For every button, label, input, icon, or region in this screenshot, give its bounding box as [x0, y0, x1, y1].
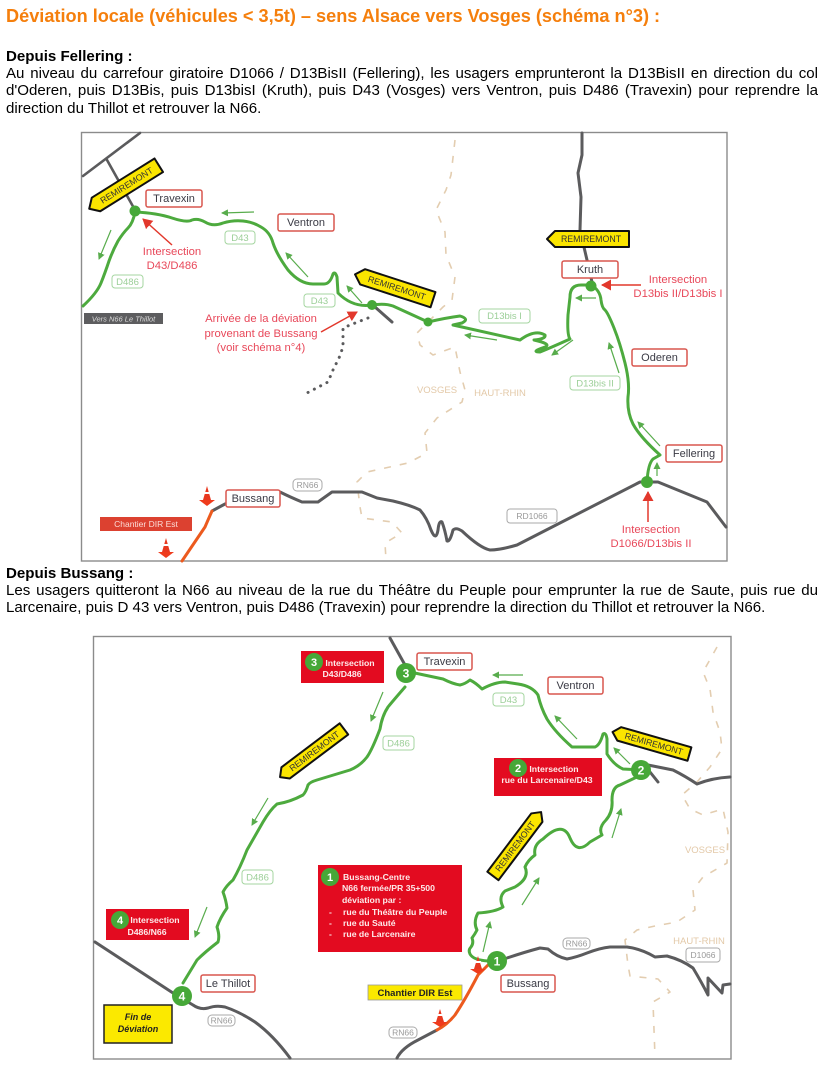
tag: Chantier DIR Est [368, 985, 462, 1000]
place: Bussang: Bussang [507, 978, 549, 990]
road: N66 Le Thillot [95, 942, 290, 1058]
road: east N66 [507, 947, 730, 995]
callout: arrivée de la déviation: provenant de Bussang [204, 328, 318, 340]
road label: D43 second: D43 [311, 296, 328, 307]
callout 1: rue de Larcenaire [343, 929, 416, 939]
sign: Remiremont NW: REMIREMONT [98, 165, 155, 206]
callout: arrivée de la déviation: (voir schéma n°4) [217, 342, 306, 354]
sign: Remiremont Bussang: REMIREMONT [493, 819, 538, 873]
place: Kruth: Kruth [577, 264, 603, 276]
text block: depuis Bussang: Les usagers quitteront la N66 au niveau de la rue du Théâtre du Peuple pour emprunter la rue de Saute, puis rue du [6, 582, 818, 599]
sign: Remiremont centre: REMIREMONT [367, 274, 428, 302]
callout: intersection D1066 [610, 492, 692, 550]
cone [158, 538, 174, 558]
place: Le Thillot: Le Thillot [206, 978, 250, 990]
callout 2 [494, 758, 602, 796]
direction arrows [195, 675, 630, 952]
sign: Remiremont centre [353, 267, 435, 307]
numbered point 1: 1 [494, 954, 501, 968]
road label: D486 upper: D486 [387, 738, 410, 750]
callout 1: - [329, 918, 332, 928]
label: Haut-Rhin: HAUT-RHIN [673, 936, 725, 947]
callout 4 [106, 909, 189, 940]
road: north of Travexin [390, 638, 405, 665]
road: stub [650, 772, 658, 782]
road label: D13bis II: D13bis II [576, 378, 614, 390]
callout 3: D43/D486 [322, 669, 362, 679]
text block: depuis Fellering: Au niveau du carrefour giratoire D1066 / D13BisII (Fellering), les usagers emprunteront la D13BisII en direction du col [6, 65, 818, 82]
road: N66 Bussang [212, 482, 726, 550]
callout 1: N66 fermée/PR 35+500 [342, 883, 435, 893]
place: Ventron [278, 214, 334, 231]
place: Bussang [226, 490, 280, 507]
sign: Remiremont east: REMIREMONT [624, 731, 685, 757]
road label: RN66 east: RN66 [566, 938, 588, 948]
road label: RN66 [293, 479, 322, 491]
place: Ventron: Ventron [557, 680, 594, 692]
road label: RD1066 [507, 509, 557, 523]
road label: D43 [225, 231, 255, 244]
callout 1: rue du Théâtre du Peuple [343, 907, 447, 917]
place: Bussang: Bussang [232, 493, 274, 505]
roadworks section [437, 965, 488, 1030]
callout: intersection D43/D486: Intersection [143, 246, 201, 258]
label: Vosges: VOSGES [685, 845, 725, 856]
callout: intersection D13bis [602, 274, 723, 300]
place: Oderen: Oderen [641, 352, 678, 364]
sign: Remiremont Bussang [487, 808, 547, 880]
callout 4: D486/N66 [127, 927, 167, 937]
road: N66 south [397, 1030, 437, 1058]
detour route D43 [410, 672, 641, 770]
cone [470, 956, 486, 974]
callout 2: rue du Larcenaire/D43 [501, 775, 593, 785]
place: Le Thillot [201, 975, 255, 992]
numbered point 2: 2 [638, 764, 645, 778]
road label: D486 lower: D486 [246, 872, 269, 884]
label: Haut-Rhin: HAUT-RHIN [474, 388, 526, 399]
dotted link from Bussang [307, 318, 368, 393]
numbered point 3 [396, 663, 416, 683]
sign: Remiremont NW [85, 158, 163, 216]
callout 2: 2 [515, 763, 521, 775]
callout 1: 1 [327, 872, 333, 884]
place: Travexin: Travexin [424, 656, 465, 668]
tag: fin de déviation: Déviation [118, 1024, 159, 1034]
callout: arrivée de la déviation: Arrivée de la déviation [205, 313, 317, 325]
sign: Remiremont east [611, 725, 691, 761]
department border [357, 140, 465, 560]
numbered point 4: 4 [179, 990, 186, 1004]
text block: depuis Fellering: direction du Thillot et retrouver la N66. [6, 100, 261, 117]
tag: Chantier DIR Est: Chantier DIR Est [378, 988, 453, 999]
callout: intersection D13bis: Intersection [649, 274, 707, 286]
callout 1: déviation par : [342, 895, 401, 905]
road: stub [375, 307, 392, 322]
place: Fellering: Fellering [673, 448, 715, 460]
sign: Remiremont D486 [276, 723, 348, 783]
callout 4: 4 [117, 915, 124, 927]
road: Kruth north [578, 133, 592, 282]
callout: intersection D13bis: D13bis II/D13bis I [633, 288, 723, 300]
place: Ventron [548, 677, 603, 694]
cone [199, 486, 215, 506]
numbered point 3: 3 [403, 666, 410, 680]
callout: intersection D1066: Intersection [622, 524, 680, 536]
place: Travexin: Travexin [153, 193, 195, 205]
text block: depuis Bussang [6, 564, 818, 616]
callout 1: - [329, 907, 332, 917]
road label: D1066: D1066 [690, 950, 716, 960]
callout 1: - [329, 929, 332, 939]
callout 2: Intersection [529, 764, 579, 774]
road: col east [648, 765, 730, 784]
place: Fellering [666, 445, 722, 462]
direction arrows [99, 212, 660, 476]
road label: D43: D43 [231, 233, 249, 244]
detour route [469, 775, 641, 961]
callout 3: 3 [311, 657, 317, 669]
road: top left [83, 133, 140, 210]
road label: D486 lower [242, 870, 273, 884]
tag: fin de déviation: Fin de [125, 1012, 151, 1022]
road label: D43 second [304, 294, 335, 307]
callout 1: rue du Sauté [343, 918, 396, 928]
detour route D486 [183, 687, 405, 983]
callout: intersection D1066: D1066/D13bis II [610, 538, 692, 550]
text block: depuis Bussang: Larcenaire, puis D 43 vers Ventron, puis D486 (Travexin) pour reprendre la direction du Thillot et retrouver la N66. [6, 599, 765, 616]
callout 3: Intersection [325, 658, 375, 668]
road label: D13bis I [479, 309, 530, 323]
road label: RN66 south: RN66 [392, 1028, 414, 1038]
text block: depuis Fellering [6, 48, 818, 117]
numbered point 2 [631, 760, 651, 780]
road label: D13bis I: D13bis I [487, 311, 522, 322]
sign: Remiremont Kruth [547, 231, 629, 247]
tag: vers N66 Le Thillot [84, 313, 163, 324]
callout 1 [318, 865, 462, 952]
roadworks section [182, 511, 212, 561]
tag: fin de déviation [104, 1005, 172, 1043]
road label: RD1066: RD1066 [516, 511, 548, 521]
numbered point 1 [487, 951, 507, 971]
road label: D486: D486 [116, 277, 139, 288]
road label: D43 [493, 693, 524, 706]
sign: Remiremont D486: REMIREMONT [287, 729, 342, 773]
cone [432, 1009, 448, 1027]
callout: arrivée de la déviation [204, 312, 357, 354]
place: Travexin [417, 653, 472, 670]
text block: depuis Fellering: Depuis Fellering : [6, 48, 133, 64]
place: Oderen [632, 349, 687, 366]
road label: D486 [112, 275, 143, 288]
road label: D1066 [686, 948, 720, 962]
place: Bussang [501, 975, 555, 992]
place: Travexin [146, 190, 202, 207]
road label: RN66: RN66 [297, 480, 319, 490]
callout: intersection D43/D486: D43/D486 [147, 260, 197, 272]
tag: Chantier DIR Est [100, 517, 192, 531]
callout: intersection D43/D486 [143, 219, 201, 272]
text block: depuis Bussang: Depuis Bussang : [6, 564, 133, 582]
green junction dots [130, 206, 653, 488]
tag: Chantier DIR Est: Chantier DIR Est [114, 519, 179, 529]
numbered point 4 [172, 986, 192, 1006]
sign: Remiremont Kruth: REMIREMONT [561, 234, 622, 244]
department border [625, 647, 728, 1057]
detour route [83, 212, 660, 482]
label: Vosges: VOSGES [417, 385, 457, 396]
place: Ventron: Ventron [287, 217, 325, 229]
callout 4: Intersection [130, 915, 180, 925]
place: Kruth [562, 261, 618, 278]
title: Déviation locale (véhicules < 3,5t) – sens Alsace vers Vosges (schéma n°3) : [6, 6, 660, 26]
tag: vers N66 Le Thillot: Vers N66 Le Thillot [92, 314, 156, 324]
road label: RN66 west: RN66 [211, 1016, 233, 1026]
road label: D486 upper [383, 736, 414, 750]
callout 1: Bussang-Centre [343, 872, 410, 882]
text block: depuis Fellering: d'Oderen, puis D13Bis, puis D13bisI (Kruth), puis D43 (Vosges) vers Ventron, puis D486 (Travexin) pour reprendre la [6, 82, 818, 99]
road label: D13bis II [570, 376, 620, 390]
road label: D43: D43 [500, 695, 517, 706]
callout 3 [301, 651, 384, 683]
